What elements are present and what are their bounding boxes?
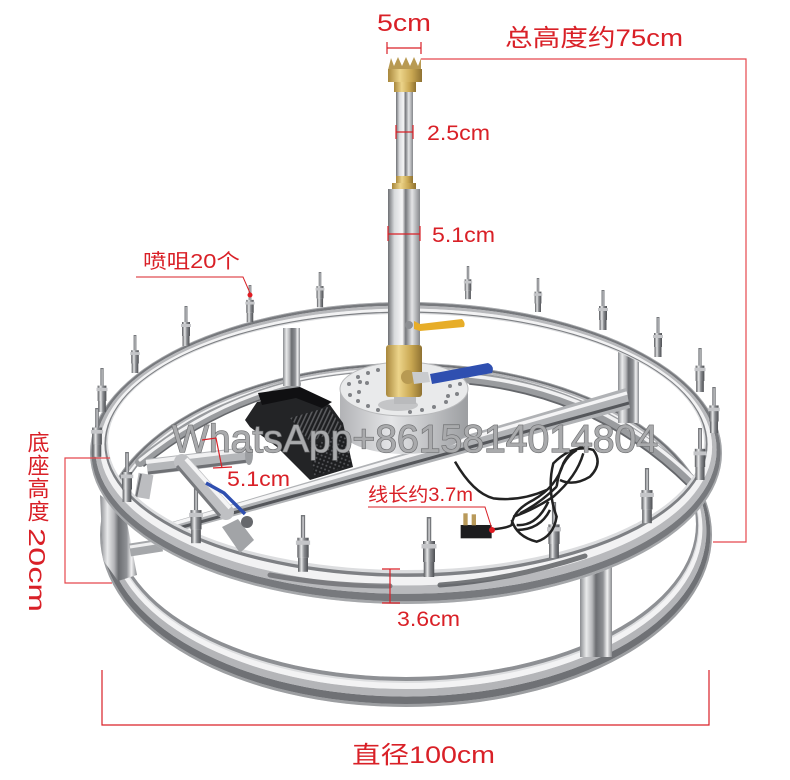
main vertical column with brass nozzle: [386, 57, 422, 404]
watermark: WhatsApp+8615814014804: [172, 418, 658, 461]
ring support legs: [100, 328, 639, 657]
dimension: nozzle head width: [377, 10, 431, 54]
dimension: ring tube 3.6cm: [382, 569, 460, 631]
dimension: lower tube width: [388, 224, 495, 247]
callout: cable length: [368, 484, 495, 533]
drain valve with blue handle: [177, 459, 254, 553]
round distributor disc: [340, 362, 468, 454]
dimension: overall diameter: [102, 670, 709, 769]
submersible pump: [245, 387, 353, 480]
dimension: total height: [421, 25, 746, 542]
dimension: total height: 总高度约75cm: [505, 25, 683, 52]
blue ball valve handle: [401, 363, 493, 384]
dimension: base height: [24, 431, 112, 612]
back arcs of the lower ring: [140, 376, 694, 486]
callout: 20 nozzles: [136, 250, 252, 298]
dimension: overall diameter: 直径100cm: [352, 742, 495, 769]
cross bars of the frame: [136, 388, 630, 532]
dimension: pipe diameter 5.1cm: 5.1cm: [227, 468, 290, 491]
dimension: lower tube width: 5.1cm: [432, 224, 495, 247]
dimension: ring tube 3.6cm: 3.6cm: [397, 608, 460, 631]
power cord and plug: [455, 447, 598, 542]
upper ring: [90, 302, 722, 604]
callout: cable length: 线长约3.7m: [368, 484, 473, 506]
nozzles: 20 spray heads on the ring: [91, 266, 720, 577]
yellow ball valve handle: [405, 319, 465, 331]
dimension: nozzle head width: 5cm: [377, 10, 431, 37]
dimension: base height: 底座高度: [24, 431, 50, 523]
dimension: base height: 20cm: [24, 528, 50, 612]
dimension: upper tube width: [396, 122, 490, 145]
dimension: pipe diameter 5.1cm: [202, 438, 290, 491]
lower base ring: [100, 363, 712, 707]
dimension: upper tube width: 2.5cm: [427, 122, 490, 145]
callout: 20 nozzles: 喷咀20个: [143, 250, 240, 273]
